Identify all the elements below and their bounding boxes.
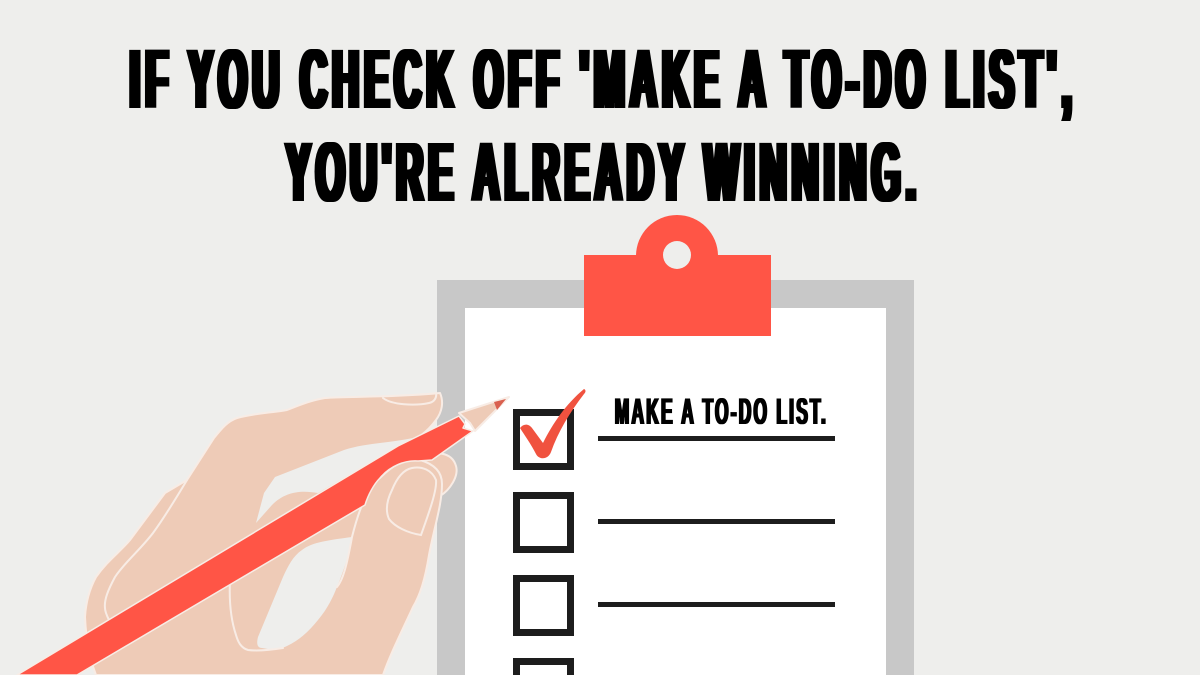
pencil wood tip [459, 397, 509, 431]
checklist [513, 389, 835, 675]
red check mark [520, 389, 586, 458]
pencil lead [494, 399, 506, 410]
back finger [420, 453, 457, 496]
checkbox 4 [513, 658, 574, 675]
pencil body [17, 416, 473, 675]
item line 3 [598, 602, 835, 607]
clipboard [437, 215, 914, 675]
item line 2 [598, 519, 835, 524]
finger outlines [105, 393, 436, 650]
checkbox 3 [516, 578, 570, 632]
checkbox 2 [516, 496, 570, 550]
title [130, 32, 1072, 219]
gap between index finger and middle finger [256, 438, 413, 523]
list item text: MAKE A TO-DO LIST. [615, 392, 826, 433]
thumbnail [387, 468, 436, 535]
checkbox 1 [516, 412, 570, 466]
paper sheet [465, 308, 886, 675]
title: IF YOU CHECK OFF 'MAKE A TO-DO LIST', [130, 32, 1072, 126]
clipboard clip [584, 215, 771, 336]
pencil [17, 397, 509, 675]
title: YOU'RE ALREADY WINNING. [286, 125, 916, 219]
hand holding pencil [17, 393, 509, 675]
item line 1 [598, 436, 835, 441]
gap between middle finger and thumb [257, 537, 352, 649]
clipboard board [437, 280, 914, 675]
hand [85, 393, 442, 675]
